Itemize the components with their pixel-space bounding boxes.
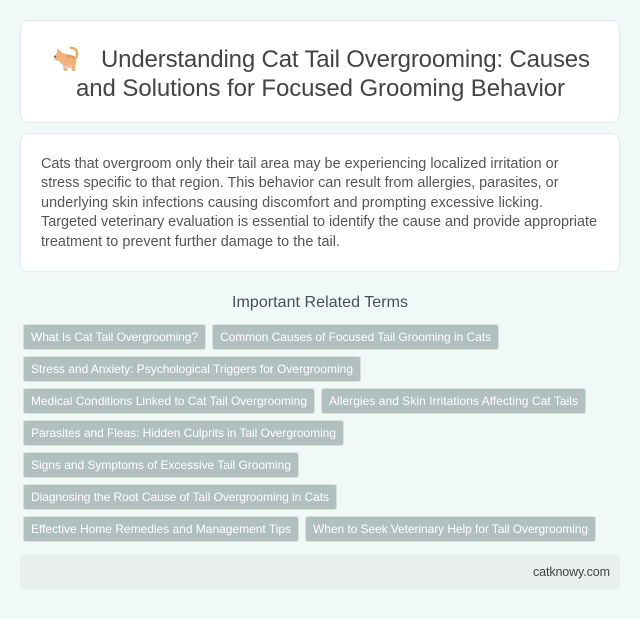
- heading: related terms: Important Related Terms: [232, 294, 408, 311]
- text block: description: stress specific to that region. This behavior can result from allergies, parasites, or: [41, 175, 559, 191]
- chip: allergies: [322, 388, 586, 414]
- chip: parasites: [24, 420, 344, 446]
- icon: cat: [54, 48, 77, 71]
- chip: home remedies: [24, 516, 298, 542]
- chip: signs: Signs and Symptoms of Excessive Tail Grooming: [31, 458, 291, 472]
- chip: veterinary help: When to Seek Veterinary Help for Tail Overgrooming: [313, 522, 588, 536]
- text block: description: underlying skin infections causing discomfort and prompting excessive licking.: [41, 195, 543, 211]
- chip: allergies: Allergies and Skin Irritations Affecting Cat Tails: [329, 394, 578, 408]
- footer: catknowy.com: [533, 565, 610, 579]
- chip: medical: Medical Conditions Linked to Cat Tail Overgrooming: [31, 394, 307, 408]
- title: [76, 46, 590, 102]
- panel: title card: [20, 20, 620, 122]
- chip: veterinary help: [306, 516, 596, 542]
- chip: what is: [24, 324, 206, 350]
- chip: diagnosing: Diagnosing the Root Cause of Tail Overgrooming in Cats: [31, 490, 329, 504]
- chip: common causes: Common Causes of Focused Tail Grooming in Cats: [220, 330, 491, 344]
- text block: description: Cats that overgroom only their tail area may be experiencing localized irritation or: [41, 156, 559, 172]
- text block: description: treatment to prevent further damage to the tail.: [41, 234, 340, 250]
- panel: description card: [20, 134, 620, 272]
- text block: description: Targeted veterinary evaluation is essential to identify the cause and provide appropriate: [41, 214, 597, 230]
- chip: home remedies: Effective Home Remedies and Management Tips: [31, 522, 291, 536]
- panel: related term chips: [24, 324, 596, 542]
- text block: description: [41, 156, 597, 250]
- title: Understanding Cat Tail Overgrooming: Causes: [101, 46, 590, 73]
- chip: stress: Stress and Anxiety: Psychological Triggers for Overgrooming: [31, 362, 353, 376]
- chip: signs: [24, 452, 298, 478]
- chip: diagnosing: [24, 484, 336, 510]
- chip: parasites: Parasites and Fleas: Hidden Culprits in Tail Overgrooming: [31, 426, 336, 440]
- title: and Solutions for Focused Grooming Behavior: [76, 75, 565, 102]
- chip: medical: [24, 388, 314, 414]
- chip: stress: [24, 356, 360, 382]
- chip: common causes: [212, 324, 498, 350]
- footer: [20, 555, 620, 589]
- chip: what is: What Is Cat Tail Overgrooming?: [31, 330, 198, 344]
